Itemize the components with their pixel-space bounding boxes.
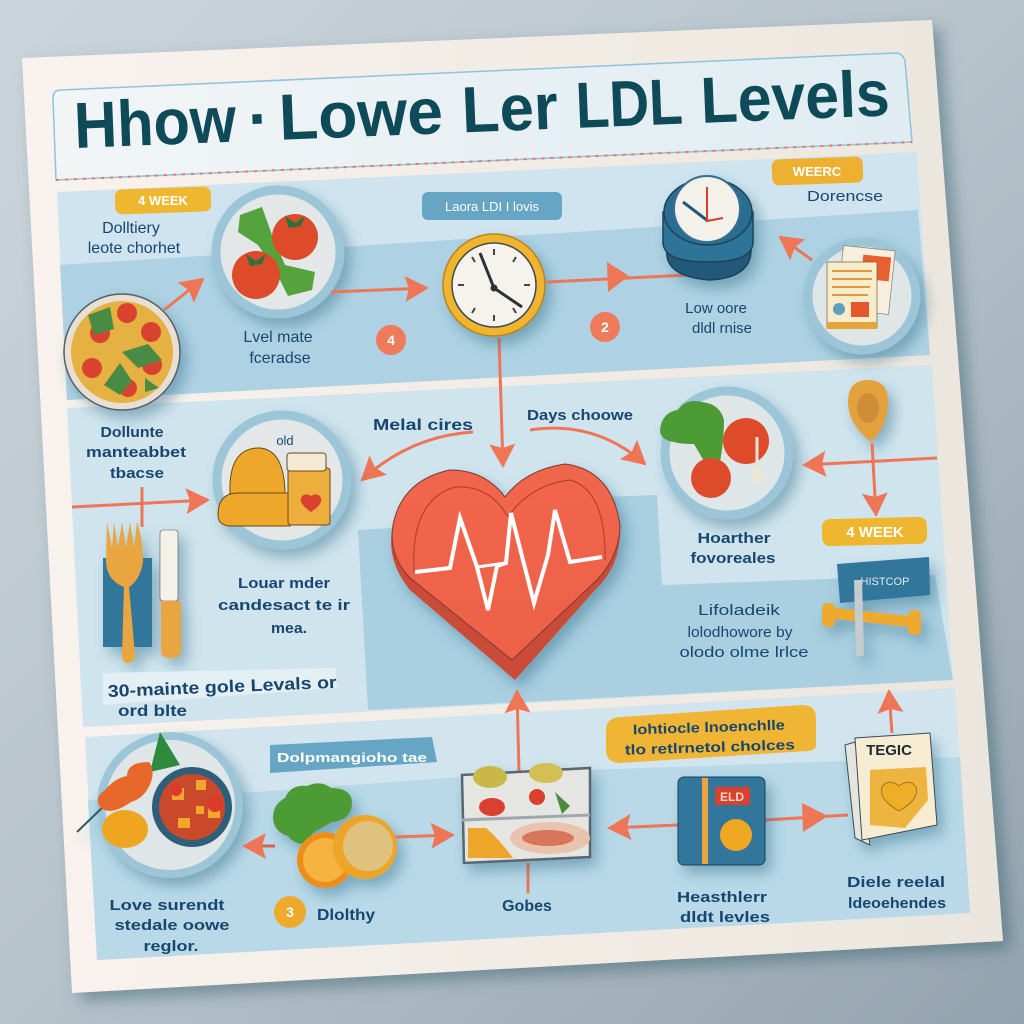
icon: dumbbell sign: HISTCOP xyxy=(861,576,909,588)
text: left middle: manteabbet xyxy=(86,444,186,461)
text: gobes: Gobes xyxy=(502,898,552,915)
text: lifestyle: lolodhowore by xyxy=(688,624,793,641)
icon: plate with vegetables xyxy=(77,732,239,874)
text: love: stedale oowe xyxy=(114,917,230,934)
number 4 xyxy=(376,325,406,355)
text: dlolthy: Dlolthy xyxy=(317,907,375,924)
number 3 xyxy=(274,896,306,928)
icon: plate with food: old xyxy=(276,433,294,448)
icon: tomatoes plate xyxy=(216,190,340,314)
arrow: citrus to plate xyxy=(244,844,275,848)
icon: bowl xyxy=(64,294,180,410)
text: lower xyxy=(218,575,350,637)
text: love: Love surendt xyxy=(110,897,224,914)
arrow: down to badge xyxy=(872,443,876,515)
text: diele: Diele reelal xyxy=(847,874,945,891)
arrow: documents to drum xyxy=(780,237,812,260)
title: Levels xyxy=(699,56,891,137)
title: Lowe xyxy=(277,74,444,154)
number 4: 4 xyxy=(387,332,395,348)
tag: clock label xyxy=(422,192,562,220)
number 3: 3 xyxy=(286,904,294,920)
text: level mate: Lvel mate xyxy=(243,329,313,346)
title xyxy=(73,56,891,162)
arrow: clock to drum xyxy=(547,262,688,292)
text: healthier: dldt levles xyxy=(680,909,770,926)
icon: fork and knife xyxy=(103,522,181,663)
text: left middle: tbacse xyxy=(110,465,164,482)
number 2: 2 xyxy=(601,319,609,335)
arrow: curve left xyxy=(362,432,473,480)
tag: clock label: Laora LDI I lovis xyxy=(445,199,539,214)
text: lower: candesact te ir xyxy=(218,597,350,614)
title: · xyxy=(246,81,271,155)
text: healthier: Heasthlerr xyxy=(677,889,767,906)
icon: vegetables plate xyxy=(660,391,789,515)
tag: blue: Dolpmangioho tae xyxy=(277,750,427,765)
text: lifestyle: Lifoladeik xyxy=(698,602,781,619)
arrow: horizontal xyxy=(804,458,937,465)
tag: blue xyxy=(270,737,437,773)
icon: plate with food xyxy=(217,415,347,545)
text: left middle: Dollunte xyxy=(100,424,164,441)
icon: spoon xyxy=(848,380,888,442)
text: diele xyxy=(847,874,946,912)
text: dietary: Dolltiery xyxy=(102,220,160,237)
arrow: left to plate xyxy=(72,487,208,527)
text: 30-minute xyxy=(103,668,337,720)
title: Hhow xyxy=(73,83,238,162)
arrow: book up xyxy=(889,691,892,733)
badge: 4 week: 4 WEEK xyxy=(846,524,904,541)
text: heart favorables: fovoreales xyxy=(690,550,776,567)
text: days: Days choowe xyxy=(527,407,633,424)
text: dietary xyxy=(88,220,181,257)
badge: 4 week top xyxy=(115,186,211,215)
icon: heart xyxy=(391,464,620,680)
icon: notebook xyxy=(678,777,765,865)
text: dietary: leote chorhet xyxy=(88,240,181,257)
tag: yellow xyxy=(606,705,816,763)
text: lifestyle: olodo olme lrlce xyxy=(680,644,808,661)
text: love: reglor. xyxy=(144,938,198,955)
tag: yellow: Iohtiocle lnoenchlle xyxy=(633,717,785,737)
arrow: citrus to tray xyxy=(395,835,453,837)
title box xyxy=(53,53,912,180)
number 2 xyxy=(590,312,620,342)
icon: documents xyxy=(808,242,916,350)
text: low core: dldl rnise xyxy=(692,320,752,337)
text: diele: ldeoehendes xyxy=(848,895,946,912)
badge: 4 week top: 4 WEEK xyxy=(138,193,189,208)
text: level mate xyxy=(243,329,313,367)
text: healthier xyxy=(677,889,770,926)
text: low core xyxy=(685,300,752,337)
icon: dumbbell sign xyxy=(822,557,930,656)
title: LDL xyxy=(574,65,684,142)
panel: middle band xyxy=(67,365,953,727)
text: heart favorables xyxy=(690,530,776,567)
icon: notebook: ELD xyxy=(720,790,744,804)
text: lower: Louar mder xyxy=(238,575,330,592)
arrow: plate to clock xyxy=(331,288,427,292)
text: 30-minute: 30-mainte gole Levals or xyxy=(107,673,337,701)
arrow: curve right xyxy=(530,428,645,464)
text: low core: Low oore xyxy=(685,300,747,317)
text: love xyxy=(110,897,230,955)
arrow: notebook to book xyxy=(765,803,848,832)
text: 30-minute: ord blte xyxy=(118,703,187,720)
arrow: clock to heart xyxy=(499,338,503,466)
icon: food tray xyxy=(462,763,590,863)
text: left middle xyxy=(86,424,186,482)
text: meal: Melal cires xyxy=(373,417,473,434)
badge: week xyxy=(772,156,863,186)
icon: timer drum xyxy=(663,176,753,280)
badge: 4 week xyxy=(822,517,927,546)
text: lower: mea. xyxy=(271,620,307,637)
panel: top band xyxy=(57,152,930,400)
text: lifestyle xyxy=(680,602,808,661)
badge: week: WEERC xyxy=(793,164,842,179)
icon: book with heart: TEGIC xyxy=(866,742,912,759)
icon: clock xyxy=(443,234,545,336)
arrow: notebook to tray xyxy=(609,825,678,828)
tag: yellow: tlo retlrnetol cholces xyxy=(625,736,795,758)
title: Ler xyxy=(460,70,559,146)
text: heart favorables: Hoarther xyxy=(698,530,771,547)
icon: book with heart xyxy=(845,733,937,845)
text: defence: Dorencse xyxy=(807,188,883,205)
line: below tray xyxy=(526,863,530,893)
arrow: tray up to heart xyxy=(517,691,519,772)
panel: bottom band xyxy=(85,688,970,960)
text: level mate: fceradse xyxy=(249,350,311,367)
arrow: bowl to plate xyxy=(164,279,203,310)
icon: citrus and broccoli xyxy=(273,783,397,888)
